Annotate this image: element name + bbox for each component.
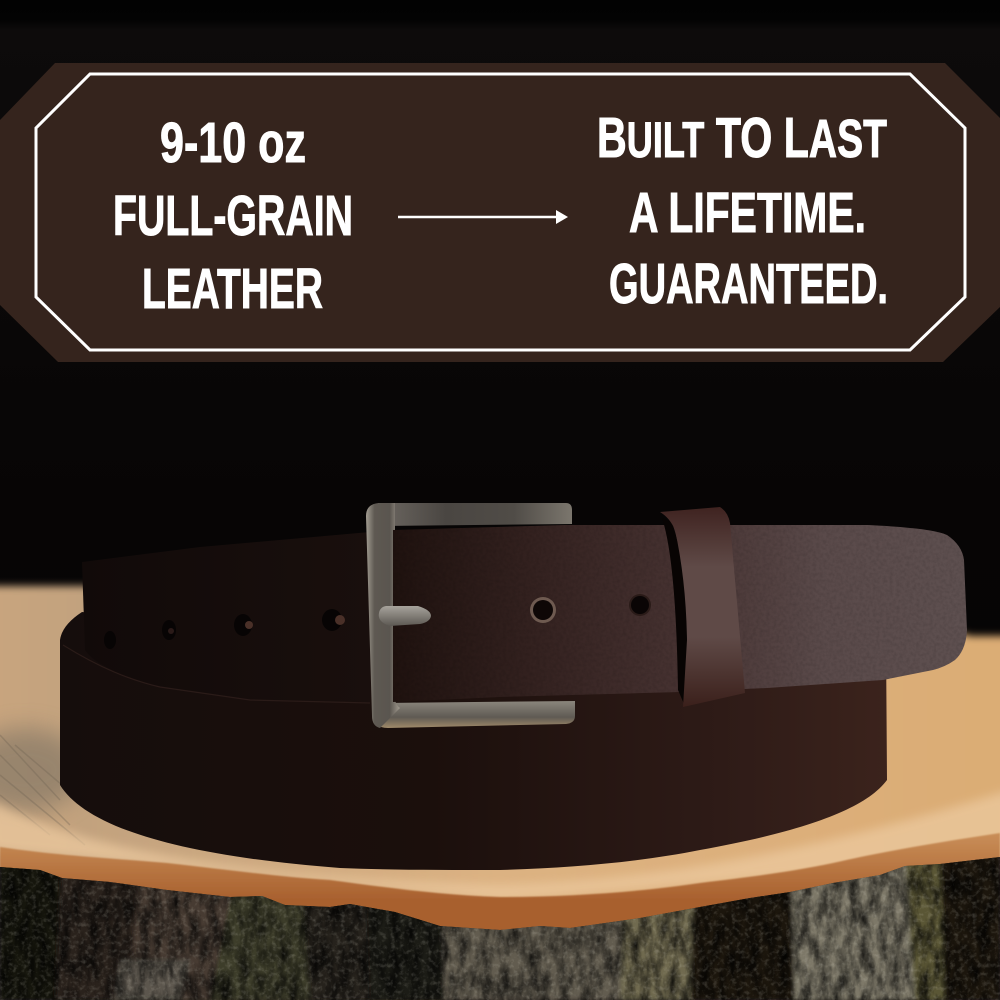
buckle (366, 503, 575, 728)
wood grain lines at left (0, 735, 85, 845)
orange rim (0, 833, 1000, 945)
arrow (398, 210, 568, 224)
right text block (597, 106, 888, 316)
buckle tongue (379, 606, 431, 626)
banner: brown plate (0, 63, 1000, 362)
belt (60, 503, 973, 870)
grey grain shading at left (0, 728, 85, 812)
banner (0, 63, 1000, 362)
left text block: FULL-GRAIN (113, 184, 353, 248)
belt: upper band left section with holes (63, 532, 370, 703)
wood slice top (0, 586, 1000, 950)
left text block (113, 111, 353, 321)
belt keeper loop (660, 507, 745, 707)
right text block: BUILT TO LAST (597, 106, 887, 170)
tree bark (0, 850, 1000, 1000)
belt: upper band right section with tip (393, 520, 973, 705)
belt: lower band (60, 612, 887, 870)
left text block: 9-10 oz (160, 111, 306, 175)
banner: white outline (36, 74, 965, 350)
left text block: LEATHER (142, 257, 323, 321)
right text block: A LIFETIME. (629, 181, 866, 245)
cream front edge (0, 790, 1000, 900)
